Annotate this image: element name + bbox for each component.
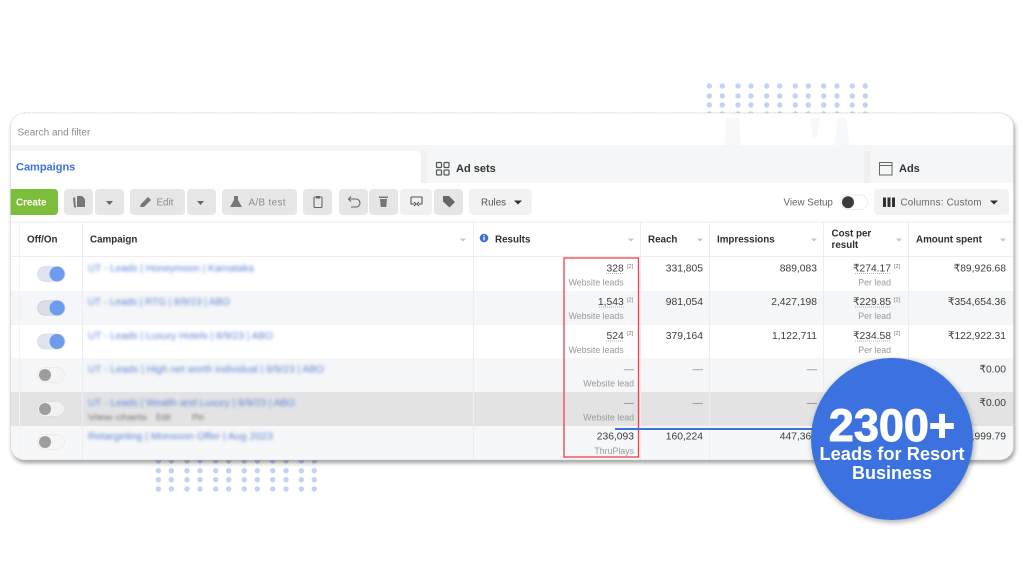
impressions column xyxy=(771,264,818,442)
results column: Website leads xyxy=(569,277,624,287)
results column: — xyxy=(624,364,635,376)
results column xyxy=(569,264,635,456)
reach column xyxy=(666,264,704,442)
results column: [2] xyxy=(627,298,634,304)
tag button xyxy=(434,189,463,215)
row backgrounds xyxy=(10,291,1014,460)
decorative dot grid: bottom left xyxy=(156,458,317,492)
results column: Website lead xyxy=(583,412,634,422)
table header: Impressions xyxy=(717,234,775,246)
impressions column: 889,083 xyxy=(780,264,817,274)
undo button xyxy=(339,189,368,215)
blurred campaign names: UT - Leads | RTG | 8/9/23 | ABO xyxy=(88,297,230,308)
tab: ad sets: Ad sets xyxy=(456,163,496,175)
results column: Website lead xyxy=(583,378,634,388)
toolbar xyxy=(10,189,1009,215)
rules button xyxy=(469,189,532,215)
impressions column: — xyxy=(807,398,818,409)
blue connector line xyxy=(615,428,815,430)
cost per result column: ₹274.17 xyxy=(853,264,891,274)
create button xyxy=(10,189,58,215)
cost per result column: ₹229.85 xyxy=(853,297,891,308)
callout: 2300+ leads badge: Business xyxy=(852,463,932,483)
tab bar xyxy=(10,145,1014,183)
toggles off xyxy=(38,368,64,450)
amount spent column: ₹0.00 xyxy=(979,398,1006,409)
blurred campaign names: Pin xyxy=(192,412,205,422)
search bar xyxy=(18,128,90,136)
results column: ThruPlays xyxy=(594,446,635,456)
cost per result column: Per lead xyxy=(858,277,891,287)
tab: ads: Ads xyxy=(899,163,920,175)
blurred campaign names: Retargeting | Monsoon Offer | Aug 2023 xyxy=(88,432,273,442)
a/b test button: A/B test xyxy=(248,198,286,208)
amount spent column: ₹104,999.79 xyxy=(948,432,1006,442)
edit button xyxy=(130,189,216,215)
results column: Website leads xyxy=(569,311,624,321)
blurred campaign names: UT - Leads | Luxury Hotels | 8/9/23 | ABO xyxy=(88,331,273,342)
reach column: 981,054 xyxy=(666,297,703,308)
reach column: — xyxy=(693,398,704,409)
blurred campaign names xyxy=(88,264,324,442)
table header: Off/On xyxy=(27,234,57,246)
blurred campaign names: UT - Leads | Honeymoon | Karnataka xyxy=(88,264,254,274)
amount spent column: ₹89,926.68 xyxy=(954,264,1006,274)
rules button: Rules xyxy=(481,198,506,208)
results column: 328 xyxy=(607,264,624,274)
callout: 2300+ leads badge: 2300+ xyxy=(829,400,955,451)
a/b test button xyxy=(222,189,297,215)
impressions column: 2,427,198 xyxy=(771,297,817,308)
results column: 236,093 xyxy=(597,432,634,442)
table xyxy=(10,222,1014,460)
blurred campaign names: View charts xyxy=(88,412,147,422)
tab: ad sets xyxy=(436,162,496,175)
results column: Website leads xyxy=(569,345,624,355)
reach column: — xyxy=(693,364,704,376)
decorative dot grid: top right xyxy=(707,83,868,117)
cost per result column: [2] xyxy=(894,298,901,304)
view setup toggle xyxy=(784,195,868,210)
share button xyxy=(400,189,432,215)
table header: result xyxy=(832,240,859,251)
clipboard button xyxy=(303,189,332,215)
blurred campaign names: UT - Leads | High net worth individual | 8/9/23 | ABO xyxy=(88,364,324,376)
impressions column: — xyxy=(807,364,818,376)
amount spent column xyxy=(948,264,1006,442)
create button: Create xyxy=(16,198,47,208)
results column: [2] xyxy=(627,264,634,270)
table header: Amount spent xyxy=(916,234,983,246)
callout: 2300+ leads badge: Leads for Resort xyxy=(820,443,964,464)
results column: 1,543 xyxy=(598,297,624,308)
reach column: 331,805 xyxy=(666,264,703,274)
blurred campaign names: Edit xyxy=(156,412,171,422)
red highlight box: results xyxy=(564,258,638,457)
reach column: 379,164 xyxy=(666,331,703,342)
cost per result column: [2] xyxy=(894,264,901,270)
cost per result column: ₹234.58 xyxy=(853,331,891,342)
duplicate button xyxy=(64,189,124,215)
table header: Reach xyxy=(648,234,677,246)
toggles on xyxy=(38,266,65,349)
blurred campaign names: UT - Leads | Wealth and Luxury | 8/9/23 | ABO xyxy=(88,398,295,409)
columns button xyxy=(874,189,1009,215)
cost per result column: Per lead xyxy=(858,345,891,355)
table header xyxy=(27,230,1006,248)
amount spent column: ₹0.00 xyxy=(979,364,1006,376)
columns button: Columns: Custom xyxy=(900,198,982,208)
cost per result column: Per lead xyxy=(858,311,891,321)
impressions column: 1,122,711 xyxy=(772,331,817,342)
callout: 2300+ leads badge xyxy=(811,358,973,520)
results column: 524 xyxy=(607,331,624,342)
table header: Campaign xyxy=(90,234,137,246)
tab: campaigns xyxy=(10,151,421,183)
amount spent column: ₹354,654.36 xyxy=(948,297,1006,308)
tab: campaigns: Campaigns xyxy=(16,162,75,174)
edit button: Edit xyxy=(156,198,174,208)
table header: Results xyxy=(495,234,531,246)
panel: ads manager screenshot xyxy=(10,113,1014,460)
amount spent column: ₹122,922.31 xyxy=(948,331,1006,342)
results column: [2] xyxy=(627,331,634,337)
cost per result column: [2] xyxy=(894,331,901,337)
cost per result column xyxy=(853,264,901,355)
delete button xyxy=(369,189,398,215)
impressions column: 447,361 xyxy=(780,432,817,442)
table header: Cost per xyxy=(832,228,871,240)
reach column: 160,224 xyxy=(666,432,703,442)
search bar: Search and filter xyxy=(18,128,91,138)
view setup toggle: View Setup xyxy=(784,198,833,208)
results column: — xyxy=(624,398,635,409)
tab: ads xyxy=(880,162,920,175)
